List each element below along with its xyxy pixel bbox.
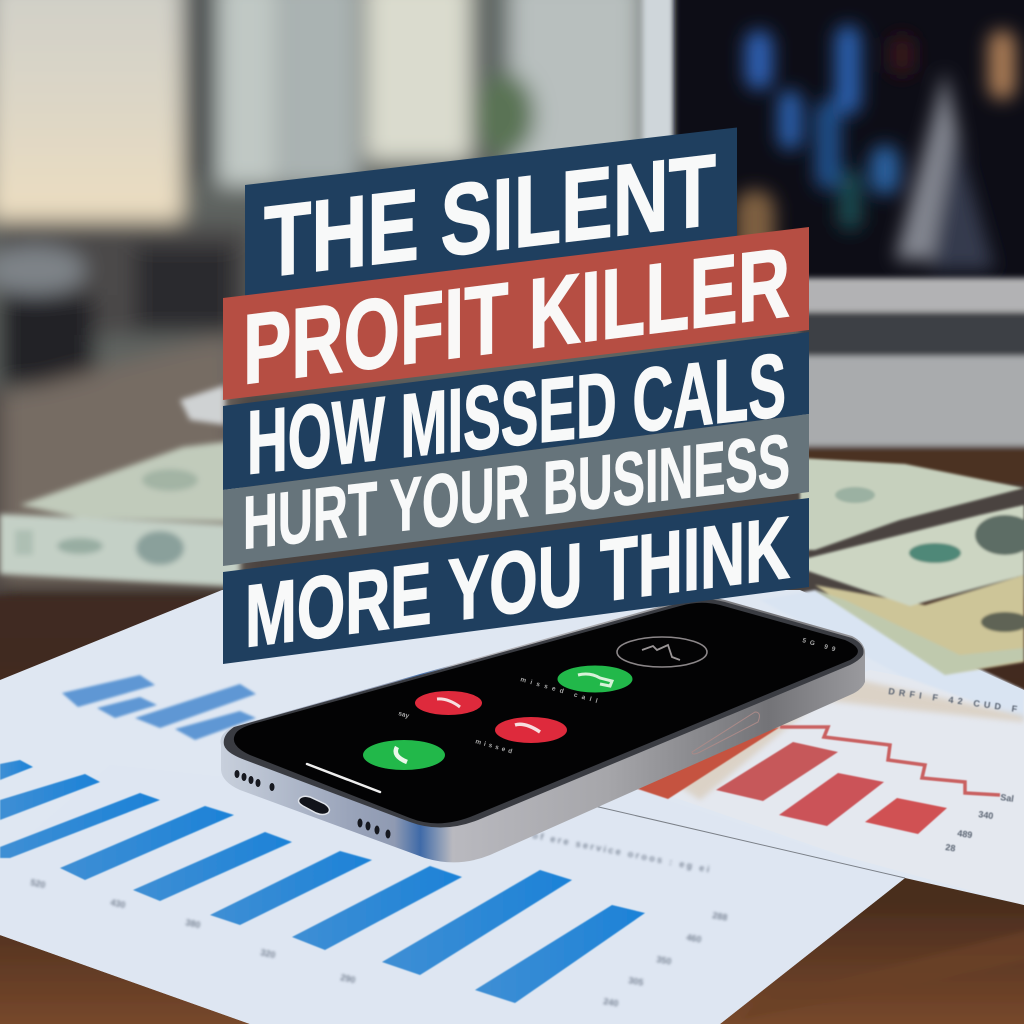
sheet small labels: 320 xyxy=(260,947,276,960)
red bar chart xyxy=(605,727,947,834)
side button xyxy=(692,712,759,754)
red trend line xyxy=(780,727,1000,795)
speaker holes right xyxy=(358,818,390,838)
sheet small labels: 288 xyxy=(712,910,728,923)
chart labels: 28 xyxy=(945,842,956,853)
call labels: missed call xyxy=(519,676,598,705)
call labels: 5G 99 xyxy=(801,637,836,653)
call labels: missed xyxy=(474,738,513,755)
green answer button bottom xyxy=(363,740,445,770)
banner: more you think: MORE YOU THINK xyxy=(245,498,790,666)
contact circle icon xyxy=(617,637,707,667)
phone screen xyxy=(234,603,858,823)
smartphone xyxy=(220,597,865,862)
report sheet with red falling chart xyxy=(600,590,1024,905)
red decline button right xyxy=(495,717,567,743)
sheet small labels: 380 xyxy=(185,917,201,930)
red decline button left xyxy=(415,691,482,715)
call labels xyxy=(397,637,836,755)
sheet small labels: 430 xyxy=(110,897,126,910)
banner: profit killer: PROFIT KILLER xyxy=(243,227,790,406)
call labels: say xyxy=(397,710,410,720)
phone body xyxy=(220,597,865,862)
blurred dollar bills, left xyxy=(0,440,240,587)
charging port xyxy=(299,796,329,814)
upper small blue bars xyxy=(62,675,256,740)
banner: the silent: THE SILENT xyxy=(264,133,716,299)
back report sheet, upper left xyxy=(0,590,1024,1024)
banner: profit killer xyxy=(223,227,809,406)
title banners xyxy=(223,128,809,666)
chart labels: 489 xyxy=(957,828,973,840)
sheet small labels: 305 xyxy=(628,975,644,988)
chart labels: Sal xyxy=(1000,792,1014,804)
dollar bills, right xyxy=(800,458,1024,675)
sheet small labels: of ere service oroos : eg ei xyxy=(532,830,710,874)
chart labels: DRFI F 42 CUD F xyxy=(888,686,1018,714)
banner: how missed calls xyxy=(223,332,809,494)
speaker holes left xyxy=(234,770,274,791)
banner: the silent xyxy=(245,128,737,315)
chart labels: 340 xyxy=(978,809,994,821)
wooden table foreground xyxy=(0,596,1024,1024)
chart labels xyxy=(888,686,1018,853)
front report sheet with blue bar chart xyxy=(0,675,905,1024)
home indicator xyxy=(307,764,380,792)
sheet small labels: 290 xyxy=(340,972,356,985)
banner: hurt your business xyxy=(223,414,809,566)
green answer button top xyxy=(558,666,632,692)
banner: more you think xyxy=(223,498,809,666)
sheet small labels: 350 xyxy=(656,954,672,967)
large blue bars xyxy=(0,760,645,1003)
sheet small labels: 460 xyxy=(686,932,702,945)
sheet small labels xyxy=(30,830,728,1009)
sheet small labels: 520 xyxy=(30,877,46,890)
sheet small labels: 240 xyxy=(603,996,619,1009)
